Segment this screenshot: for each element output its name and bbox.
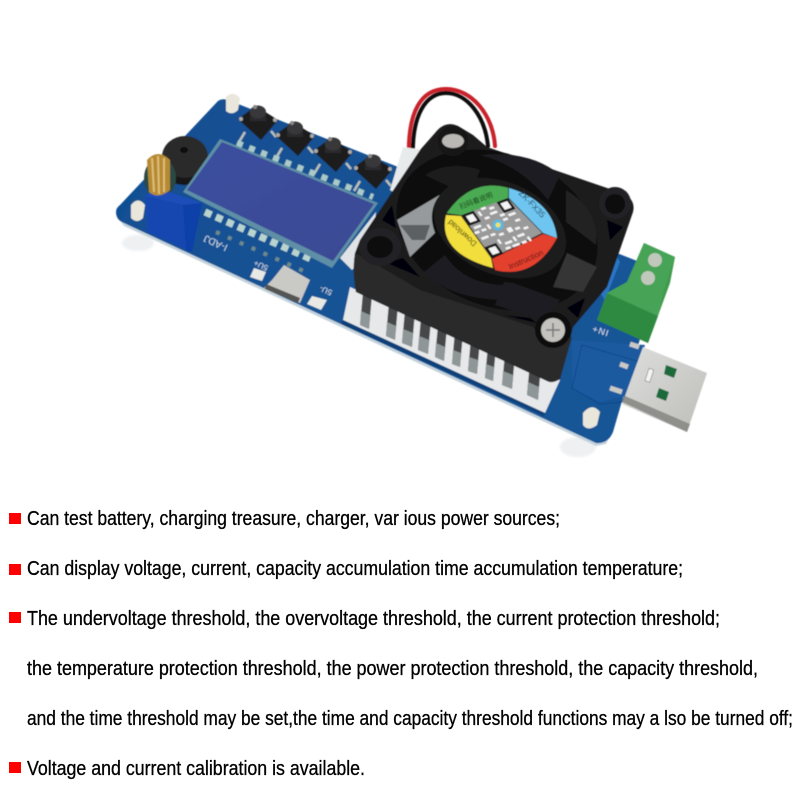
micro USB port — [264, 265, 310, 303]
silk label 5V-: 5U- — [318, 283, 334, 297]
sticker label: 扫码看说明 — [458, 190, 494, 212]
cooling fan — [354, 121, 634, 382]
heat sink — [341, 287, 560, 416]
white panel behind LCD — [340, 212, 376, 270]
lower pin row — [205, 212, 313, 273]
bullet item 3: The undervoltage threshold, the overvoltage threshold, the current protection threshold; — [27, 608, 720, 630]
silk label I-ADJ: I-ADJ — [202, 232, 230, 253]
silk label +NI: +NI — [591, 324, 611, 339]
plastic feet — [122, 235, 596, 457]
QR code — [462, 198, 542, 258]
mounting hole left — [359, 228, 401, 266]
fan aperture — [372, 121, 622, 339]
tact buttons — [238, 105, 393, 191]
screw terminal — [597, 243, 675, 343]
fin gaps — [360, 292, 541, 400]
potentiometer — [145, 154, 202, 252]
fan connector — [390, 147, 425, 202]
feature list — [9, 508, 793, 780]
mounting hole right — [599, 187, 631, 219]
solder pads — [250, 268, 266, 281]
sticker label: ZK-FX35 — [517, 188, 548, 220]
blades — [424, 154, 597, 320]
standoffs — [131, 94, 600, 428]
button 4 — [353, 154, 393, 191]
upper pin row — [237, 143, 373, 197]
circuit board — [116, 99, 660, 446]
buzzer — [161, 136, 208, 185]
mounting screw bottom — [535, 312, 571, 348]
sticker label: Instruction — [507, 248, 545, 271]
bullet item 2: Can display voltage, current, capacity accumulation time accumulation temperature; — [27, 558, 683, 580]
button 2 — [275, 121, 315, 158]
bullet item 1: Can test battery, charging treasure, charger, var ious power sources; — [27, 508, 560, 530]
silk label 5V+: 5U+ — [252, 258, 270, 272]
sticker sectors — [447, 186, 508, 215]
vent cutouts — [382, 205, 623, 323]
product photo: load tester module — [116, 89, 707, 457]
fan front face — [354, 253, 572, 382]
LCD screen — [183, 139, 378, 268]
button 1 — [238, 105, 278, 142]
wire loop — [409, 89, 495, 160]
button 3 — [313, 137, 353, 174]
USB plug — [610, 344, 707, 432]
sticker label: Download — [446, 218, 479, 248]
mounting screw top — [438, 126, 468, 156]
bullet item 4: Voltage and current calibration is available. — [27, 758, 365, 780]
fan body — [354, 124, 634, 382]
hub sticker — [416, 159, 582, 303]
heat sink seen through fan — [397, 193, 443, 257]
capacitor — [144, 158, 176, 198]
